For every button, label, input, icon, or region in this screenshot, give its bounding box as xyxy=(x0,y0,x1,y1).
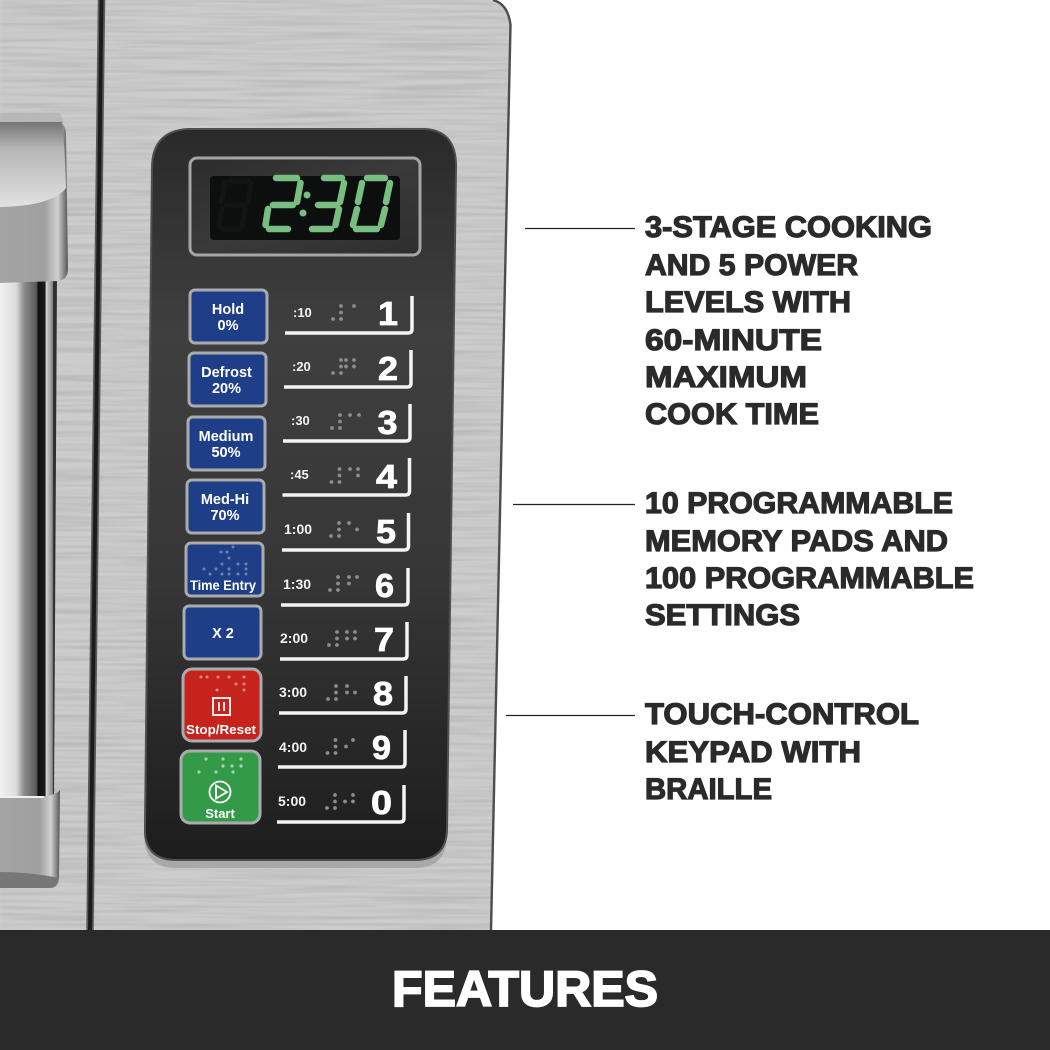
button: Time Entry: Time Entry xyxy=(190,578,256,593)
keypad row 6: 6 xyxy=(375,567,394,604)
stainless steel microwave body xyxy=(0,0,515,930)
button: Stop/Reset: Stop/Reset xyxy=(186,722,257,737)
keypad row 9 xyxy=(278,729,405,767)
keypad row 9: 9 xyxy=(372,729,391,766)
callout: 3-stage cooking xyxy=(525,211,932,431)
callout: programmable memory: 100 PROGRAMMABLE xyxy=(645,562,974,595)
keypad row 9: 4:00 xyxy=(279,739,307,755)
button: Hold 0%: 0% xyxy=(218,318,239,334)
button: X 2: X 2 xyxy=(212,626,234,642)
footer bar xyxy=(0,930,1050,1050)
keypad row 4: :45 xyxy=(290,467,309,482)
callout: touch-control keypad: KEYPAD WITH xyxy=(645,736,861,769)
callout: touch-control keypad xyxy=(506,698,919,806)
callout: 3-stage cooking: 3-STAGE COOKING xyxy=(645,211,932,244)
keypad row 8: 8 xyxy=(373,675,393,712)
button: Med-Hi 70%: Med-Hi xyxy=(201,492,249,508)
callout: touch-control keypad: BRAILLE xyxy=(645,773,772,806)
button: Hold 0% xyxy=(190,290,267,343)
callout: 3-stage cooking: LEVELS WITH xyxy=(645,286,851,319)
callout: programmable memory: MEMORY PADS AND xyxy=(645,525,948,558)
callout: programmable memory: SETTINGS xyxy=(645,599,800,632)
icon: pause xyxy=(213,698,230,715)
keypad row 0: 0 xyxy=(371,784,392,821)
button: Defrost 20%: Defrost xyxy=(201,365,252,381)
keypad row 8 xyxy=(279,675,406,713)
button: Start: Start xyxy=(205,806,235,821)
button: Med-Hi 70%: 70% xyxy=(210,508,240,524)
icon: play xyxy=(210,782,230,802)
button: Start xyxy=(181,751,260,823)
control panel xyxy=(144,129,456,868)
keypad row 2: 2 xyxy=(378,350,398,387)
callout: 3-stage cooking: 60-MINUTE xyxy=(645,324,822,357)
keypad row 1: :10 xyxy=(293,305,312,320)
keypad row 3: :30 xyxy=(291,413,310,428)
button: X 2 xyxy=(184,606,261,659)
callout: programmable memory xyxy=(513,487,974,632)
button: Medium 50%: 50% xyxy=(211,445,241,461)
keypad row 3 xyxy=(283,404,410,441)
door handle xyxy=(0,113,68,888)
keypad row 0: 5:00 xyxy=(278,793,306,809)
keypad row 5: 5 xyxy=(376,513,396,550)
keypad row 5 xyxy=(282,513,408,550)
keypad row 6: 1:30 xyxy=(283,576,311,592)
keypad row 1: 1 xyxy=(378,295,398,332)
keypad row 2: :20 xyxy=(292,359,311,374)
keypad row 6 xyxy=(281,567,408,605)
button: Defrost 20% xyxy=(189,353,266,406)
footer heading: FEATURES xyxy=(392,961,658,1017)
keypad row 5: 1:00 xyxy=(284,521,312,537)
keypad row 4: 4 xyxy=(376,458,398,495)
callout: 3-stage cooking: COOK TIME xyxy=(645,398,819,431)
keypad row 2 xyxy=(284,350,411,387)
callout: 3-stage cooking: MAXIMUM xyxy=(645,361,807,394)
keypad row 7: 7 xyxy=(374,621,394,658)
keypad row 7 xyxy=(280,621,407,659)
time readout 2:30 xyxy=(266,178,390,229)
button: Medium 50%: Medium xyxy=(199,429,253,445)
callout: 3-stage cooking: AND 5 POWER xyxy=(645,249,858,282)
keypad row 3: 3 xyxy=(378,404,398,441)
button: Med-Hi 70% xyxy=(187,480,264,533)
keypad row 8: 3:00 xyxy=(279,684,307,700)
callout: touch-control keypad: TOUCH-CONTROL xyxy=(645,698,919,731)
button: Time Entry xyxy=(186,543,263,596)
button: Stop/Reset xyxy=(183,669,261,741)
digital display xyxy=(190,158,420,255)
button: Medium 50% xyxy=(188,417,265,470)
keypad row 0 xyxy=(277,784,404,822)
callout: programmable memory: 10 PROGRAMMABLE xyxy=(645,487,953,520)
keypad row 7: 2:00 xyxy=(280,630,308,646)
button: Defrost 20%: 20% xyxy=(212,381,241,397)
button: Hold 0%: Hold xyxy=(212,302,244,318)
keypad row 1 xyxy=(285,295,412,333)
keypad row 4 xyxy=(282,458,410,495)
